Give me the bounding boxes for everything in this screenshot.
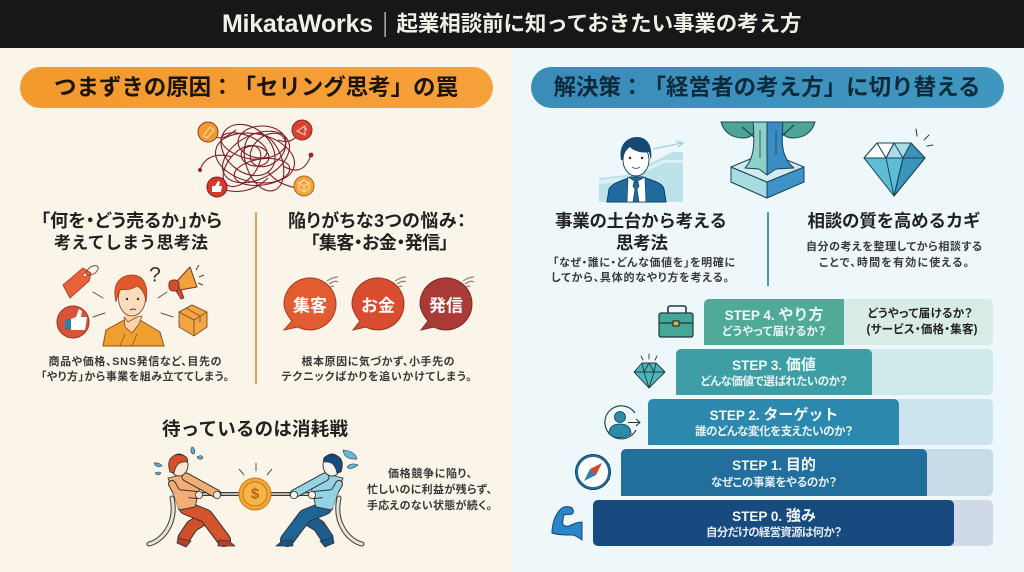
step 4: STEP 4. やり方 bbox=[725, 306, 823, 324]
bubble: お金: お金 bbox=[361, 296, 395, 316]
step 0 bbox=[593, 500, 993, 546]
divider right bbox=[767, 212, 769, 286]
text: consulting description bbox=[806, 239, 982, 269]
step 4: (サービス・価格・集客) bbox=[866, 322, 978, 336]
icon: flexed arm bbox=[552, 507, 582, 540]
icon: small diamond bbox=[634, 354, 665, 388]
text: consulting description: 自分の考えを整理してから相談する bbox=[806, 239, 982, 253]
bubble: 集客 bbox=[284, 277, 338, 330]
step 0: STEP 0. 強み bbox=[732, 508, 816, 524]
icon: like bbox=[57, 306, 89, 338]
heading: cause pill: つまずきの原因：「セリング思考」の罠 bbox=[54, 74, 458, 100]
icon: businessman with chart bbox=[599, 137, 683, 202]
text: worries description: 根本原因に気づかず、小手先の bbox=[302, 354, 455, 368]
text: attrition description bbox=[367, 466, 492, 512]
step 3: どんな価値で選ばれたいのか？ bbox=[700, 374, 848, 388]
heading: cause pill bbox=[20, 67, 493, 108]
step 2 bbox=[648, 399, 993, 445]
heading: foundation thinking bbox=[555, 211, 727, 253]
heading: foundation thinking: 事業の土台から考える bbox=[555, 211, 727, 231]
icon: megaphone bbox=[169, 265, 204, 299]
bubble: 発信 bbox=[420, 277, 474, 330]
step 4: どうやって届けるか？ bbox=[868, 306, 972, 320]
heading: solution pill bbox=[531, 67, 1004, 108]
text: selling mindset description: 商品や価格、SNS発信など、目先の bbox=[48, 354, 222, 368]
coin: $ bbox=[251, 486, 260, 502]
text: attrition description: 忙しいのに利益が残らず、 bbox=[367, 482, 492, 496]
step 2: STEP 2. ターゲット bbox=[710, 406, 838, 424]
icon: confused person with tag, megaphone, like, box bbox=[57, 264, 207, 346]
icon: tangled thread bbox=[198, 114, 314, 197]
heading: three worries bbox=[288, 210, 466, 253]
divider left bbox=[255, 212, 257, 384]
heading: three worries: 「集客・お金・発信」 bbox=[310, 233, 448, 253]
step 3 bbox=[676, 349, 993, 395]
illustration: tug of war bbox=[149, 447, 362, 547]
heading: war of attrition: 待っているのは消耗戦 bbox=[162, 418, 348, 440]
text: selling mindset description: 「やり方」から事業を組み立ててしまう。 bbox=[41, 369, 229, 383]
step 0: 自分だけの経営資源は何か？ bbox=[706, 525, 842, 539]
text: attrition description: 手応えのない状態が続く。 bbox=[367, 498, 492, 512]
text: foundation description: 「なぜ・誰に・どんな価値を」を明確に bbox=[553, 255, 735, 269]
left figure bbox=[154, 447, 235, 547]
title bar: MikataWorks bbox=[222, 10, 373, 38]
bubble: 集客: 集客 bbox=[293, 296, 327, 316]
left panel background bbox=[0, 48, 512, 572]
step 4: どうやって届けるか？ bbox=[722, 324, 826, 338]
icon: target person bbox=[605, 406, 640, 439]
text: worries description: テクニックばかりを追いかけてしまう。 bbox=[281, 369, 472, 383]
step 1 bbox=[621, 449, 993, 496]
bubble: お金 bbox=[352, 277, 406, 330]
heading: selling mindset: 「何を・どう売るか」から bbox=[41, 211, 222, 231]
text: consulting description: ことで、時間を有効に使える。 bbox=[819, 255, 969, 269]
heading: foundation thinking: 思考法 bbox=[616, 233, 668, 253]
step 1: STEP 1. 目的 bbox=[732, 456, 816, 474]
right panel background bbox=[512, 48, 1024, 572]
icon: box bbox=[179, 305, 207, 336]
title bar bbox=[0, 0, 1024, 48]
title bar: 起業相談前に知っておきたい事業の考え方 bbox=[396, 12, 802, 36]
question mark: ? bbox=[149, 264, 161, 286]
text: foundation description bbox=[551, 255, 735, 284]
heading: three worries: 陥りがちな3つの悩み： bbox=[288, 210, 466, 231]
text: selling mindset description bbox=[41, 354, 229, 383]
icon: tree on foundation bbox=[721, 122, 815, 198]
text: worries description bbox=[281, 354, 472, 383]
rope bbox=[149, 494, 362, 544]
step 4 bbox=[704, 299, 993, 345]
bubble: 発信: 発信 bbox=[429, 296, 463, 316]
step 3: STEP 3. 価値 bbox=[732, 356, 816, 374]
icon: price tag bbox=[63, 266, 98, 298]
icon: briefcase bbox=[659, 306, 693, 337]
icon: diamond bbox=[864, 129, 933, 196]
heading: key to consulting: 相談の質を高めるカギ bbox=[808, 211, 980, 231]
step 2: 誰のどんな変化を支えたいのか？ bbox=[695, 424, 853, 438]
text: attrition description: 価格競争に陥り、 bbox=[388, 466, 472, 480]
right figure bbox=[276, 450, 358, 547]
step 1: なぜこの事業をやるのか？ bbox=[711, 475, 837, 489]
coin bbox=[239, 463, 272, 510]
text: foundation description: してから、具体的なやり方を考える。 bbox=[551, 270, 729, 284]
heading: selling mindset: 考えてしまう思考法 bbox=[54, 234, 208, 252]
heading: selling mindset bbox=[41, 211, 222, 252]
heading: solution pill: 解決策：「経営者の考え方」に切り替える bbox=[554, 75, 980, 100]
icon: compass bbox=[576, 454, 610, 490]
